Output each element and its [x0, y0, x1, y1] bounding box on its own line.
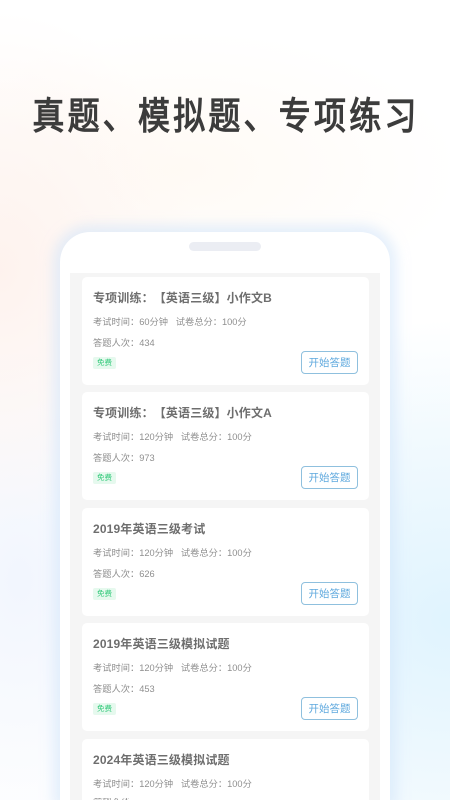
card: 小作文A: 考试时间：120分钟 试卷总分：100分	[93, 432, 252, 442]
card: 小作文B	[82, 277, 369, 385]
card: 2019年英语三级模拟试题: 答题人次：453	[93, 684, 155, 694]
panel: phone mockup	[60, 232, 390, 800]
card: 小作文A: 答题人次：973	[93, 452, 155, 462]
card: 2024年英语三级模拟试题 (cropped by frame): 考试时间：120分钟 试卷总分：100分	[93, 778, 252, 788]
card: 2019年英语三级模拟试题: 考试时间：120分钟 试卷总分：100分	[93, 662, 252, 672]
card: 小作文A: 免费	[97, 473, 112, 482]
card: 2019年英语三级考试	[82, 508, 369, 616]
card: 小作文B: 考试时间：60分钟 试卷总分：100分	[93, 316, 247, 326]
card: 2019年英语三级模拟试题: 2019年英语三级模拟试题	[93, 637, 230, 651]
card: 2024年英语三级模拟试题 (cropped by frame): 2024年英语三级模拟试题	[93, 753, 230, 767]
panel: phone screen list	[70, 273, 380, 800]
card: 小作文B: 开始答题	[308, 357, 350, 369]
card: 2024年英语三级模拟试题 (cropped by frame)	[82, 739, 369, 800]
card: 2019年英语三级考试: 答题人次：626	[93, 568, 155, 578]
card: 小作文B: 免费	[97, 358, 112, 367]
card: 小作文B: 答题人次：434	[93, 338, 155, 348]
card: 小作文A	[82, 392, 369, 500]
phone speaker	[189, 242, 261, 251]
card: 2019年英语三级考试: 开始答题	[308, 588, 350, 600]
card: 小作文A: 开始答题	[308, 472, 350, 484]
card: 2019年英语三级考试: 2019年英语三级考试	[93, 522, 205, 536]
card: 2019年英语三级模拟试题	[82, 623, 369, 731]
title: 真题、模拟题、专项练习	[32, 95, 420, 137]
card: 2019年英语三级考试: 免费	[97, 589, 112, 598]
card: 小作文A: 专项训练：【英语三级】小作文A	[93, 406, 272, 420]
card: 小作文B: 专项训练：【英语三级】小作文B	[93, 291, 272, 305]
card: 2019年英语三级模拟试题: 免费	[97, 704, 112, 713]
card: 2019年英语三级考试: 考试时间：120分钟 试卷总分：100分	[93, 548, 252, 558]
card: 2019年英语三级模拟试题: 开始答题	[308, 703, 350, 715]
